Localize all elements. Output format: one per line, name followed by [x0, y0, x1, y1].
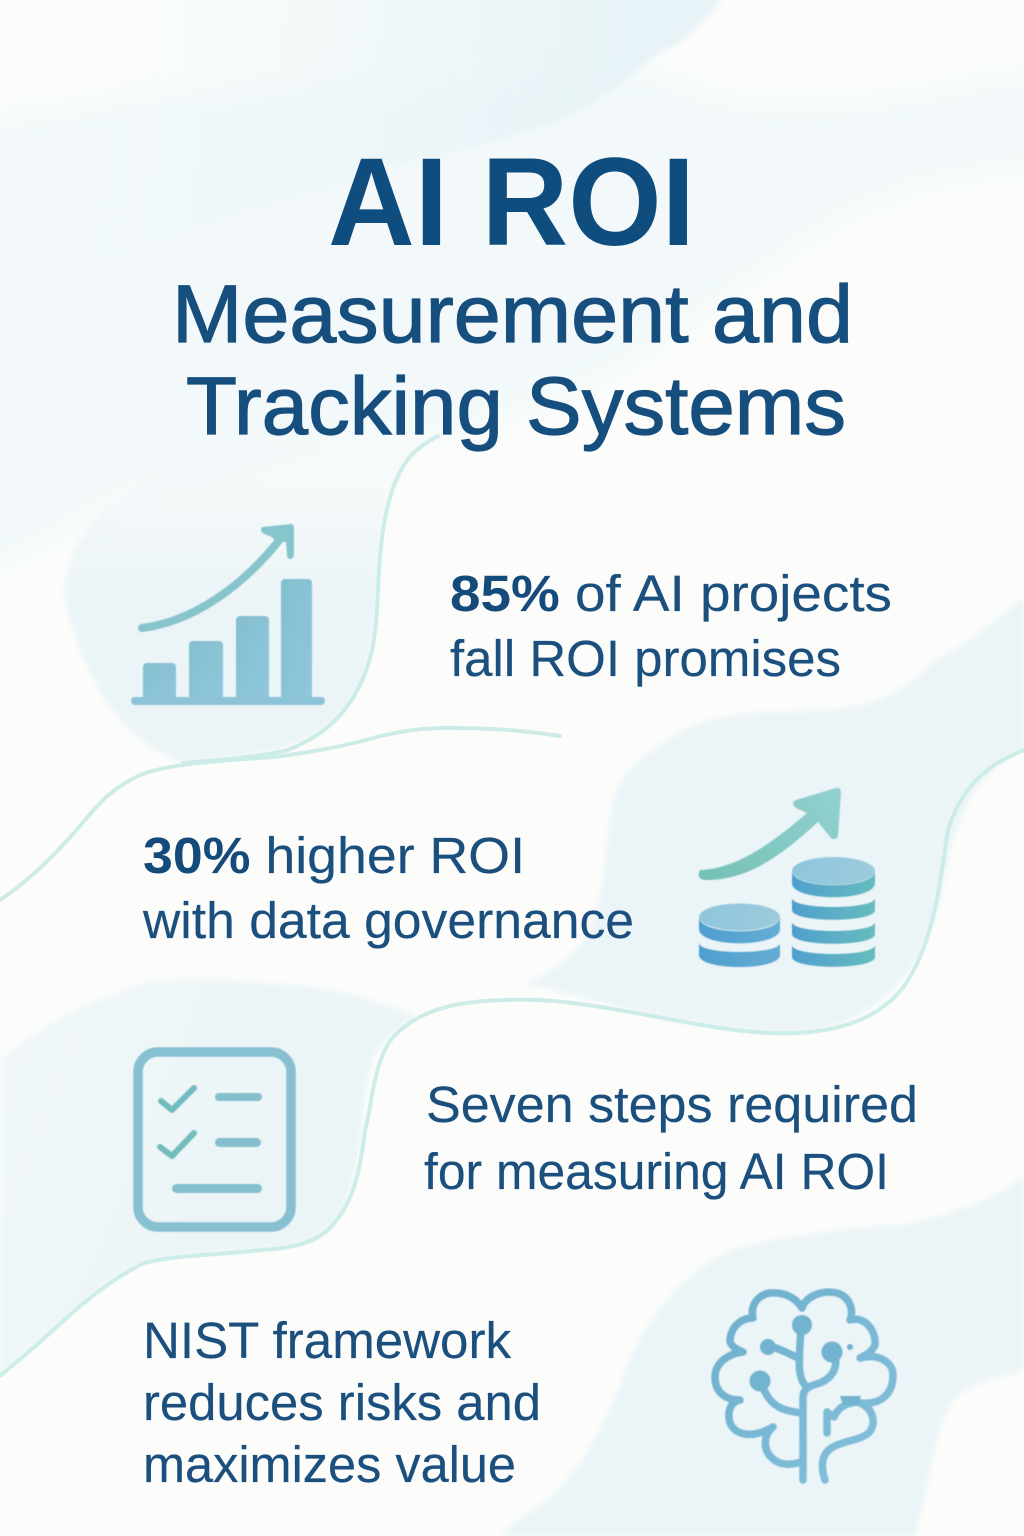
title: AI ROI: AI ROI — [328, 133, 695, 272]
title — [172, 133, 853, 452]
framework: NIST: maximizes value — [143, 1436, 516, 1493]
stat: 85% of AI projects: 85% of AI projects — [450, 565, 892, 622]
stat: 85% of AI projects — [450, 565, 892, 687]
flowing teal lines — [0, 436, 1024, 1376]
icon: brain tree — [715, 1292, 893, 1480]
subtitle line two: Tracking Systems — [186, 361, 846, 452]
stat: 30% higher ROI — [142, 827, 634, 949]
step: Seven steps required: for measuring AI ROI — [424, 1143, 889, 1200]
framework: NIST — [143, 1312, 541, 1493]
icon: bar chart with rising arrow — [131, 524, 325, 705]
icon: coin stacks with arrow — [699, 788, 875, 967]
stat: 30% higher ROI: with data governance — [142, 892, 634, 949]
right coin stack — [792, 857, 875, 967]
framework: NIST: reduces risks and — [143, 1374, 541, 1431]
stat: 30% higher ROI: 30% higher ROI — [143, 827, 525, 884]
step: Seven steps required: Seven steps required — [426, 1076, 918, 1133]
step: Seven steps required — [424, 1076, 918, 1200]
left coin stack — [699, 904, 780, 967]
subtitle line one: Measurement and — [172, 269, 853, 360]
stat: 85% of AI projects: fall ROI promises — [450, 630, 841, 687]
framework: NIST: NIST framework — [143, 1312, 511, 1369]
icon: checklist — [138, 1052, 291, 1227]
